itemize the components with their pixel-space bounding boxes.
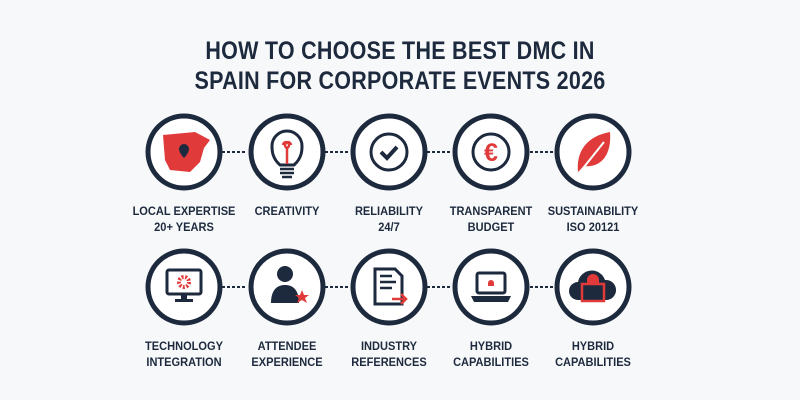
- labels row 2: TECHNOLOGY: [145, 339, 223, 353]
- icon: monitor gear: [148, 251, 220, 323]
- icon: euro: [455, 116, 527, 188]
- labels row 1: [133, 204, 235, 234]
- text: INDUSTRY: [361, 339, 417, 353]
- text: ISO 20121: [567, 220, 619, 234]
- text: ATTENDEE: [258, 339, 316, 353]
- icon: laptop: [455, 251, 527, 323]
- labels row 1: 20+ YEARS: [154, 220, 214, 234]
- text: CREATIVITY: [255, 204, 319, 218]
- icon: document: [353, 251, 425, 323]
- text: REFERENCES: [351, 355, 427, 369]
- icon: cloud: [557, 251, 629, 323]
- title: [194, 37, 605, 95]
- text: BUDGET: [468, 220, 514, 234]
- icon: spain map: [148, 116, 220, 188]
- text: 24/7: [378, 220, 400, 234]
- icon: check: [353, 116, 425, 188]
- icon: leaf: [557, 116, 629, 188]
- text: RELIABILITY: [355, 204, 423, 218]
- icon: euro: €: [484, 139, 498, 167]
- icon: bulb: [251, 116, 323, 188]
- title: SPAIN FOR CORPORATE EVENTS 2026: [194, 67, 605, 95]
- title: HOW TO CHOOSE THE BEST DMC IN: [205, 37, 595, 65]
- text: HYBRID: [470, 339, 512, 353]
- text: TRANSPARENT: [450, 204, 532, 218]
- labels row 1: LOCAL EXPERTISE: [133, 204, 235, 218]
- text: HYBRID: [572, 339, 614, 353]
- labels row 2: INTEGRATION: [146, 355, 222, 369]
- labels row 2: [145, 339, 223, 369]
- text: CAPABILITIES: [453, 355, 529, 369]
- text: CAPABILITIES: [555, 355, 631, 369]
- text: EXPERIENCE: [251, 355, 323, 369]
- icon: attendee: [251, 251, 323, 323]
- text: SUSTAINABILITY: [548, 204, 638, 218]
